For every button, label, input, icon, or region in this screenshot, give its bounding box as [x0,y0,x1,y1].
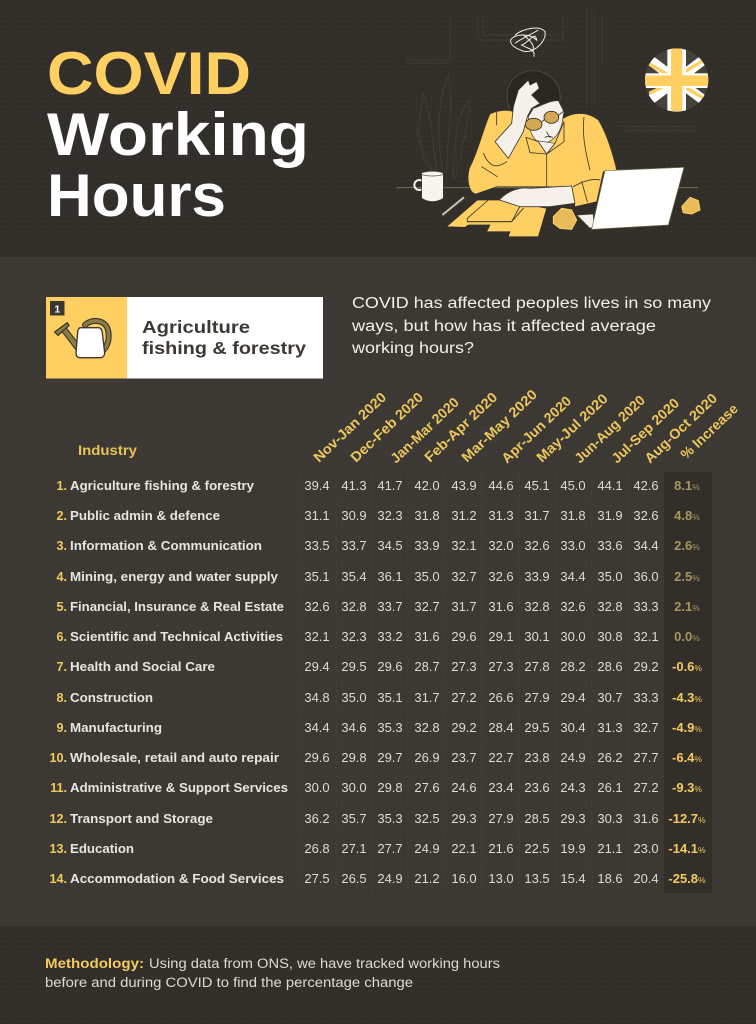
row 14: 26.5 [341,871,367,886]
row 7: 27.3 [451,659,477,674]
row 11 [50,780,702,795]
row 13 [49,841,706,856]
methodology [45,956,500,990]
row 7: 27.3 [488,659,514,674]
row 4: 32.7 [451,569,477,584]
row 6: 30.1 [524,629,550,644]
row 13: 21.6 [488,841,514,856]
row 4: 36.0 [633,569,659,584]
row 5: 33.3 [633,599,659,614]
illustration: stressed worker at desk [397,10,708,237]
row 10: 29.7 [377,750,403,765]
row 8: 35.1 [377,690,403,705]
row 14: 16.0 [451,871,477,886]
row 10: 10. [49,751,67,765]
row 4: 32.6 [488,569,514,584]
row 4: 36.1 [377,569,403,584]
row 11: 30.0 [304,780,330,795]
row 9: 35.3 [377,720,403,735]
card heading [142,317,306,358]
row 3: 32.1 [451,538,477,553]
row 11: 24.3 [560,780,586,795]
row 9: 32.7 [633,720,659,735]
crumpled paper [553,208,577,229]
row 11: -9.3% [672,780,702,795]
row 10: -6.4% [672,750,702,765]
row 3: 32.6 [524,538,550,553]
row 11: 26.1 [597,780,623,795]
row 9: 31.3 [597,720,623,735]
row 5: 32.6 [560,599,586,614]
column headings: months: Jul-Sep 2020 [608,395,682,466]
row 1: 45.1 [524,478,550,493]
row 13: 22.5 [524,841,550,856]
row 1: 1. [56,479,67,493]
row 13: 22.1 [451,841,477,856]
flag icon [645,48,708,112]
shirt [468,110,617,207]
row 4: 35.0 [597,569,623,584]
row 14: 21.2 [414,871,440,886]
row 1: 39.4 [304,478,330,493]
row 2: 31.8 [560,508,586,523]
row 6: 0.0% [674,629,700,644]
row 11: 11. [50,781,67,795]
row 4: 35.1 [304,569,330,584]
face [528,101,564,143]
row 14: 18.6 [597,871,623,886]
row 9: 9. [56,721,67,735]
row 7: 29.5 [341,659,367,674]
row 11: 27.2 [633,780,659,795]
title: Working [47,101,309,168]
row 12 [49,811,706,826]
row 9: 30.4 [560,720,586,735]
row 7: 27.8 [524,659,550,674]
row 1: 41.3 [341,478,367,493]
pen [442,197,464,215]
row 11: 27.6 [414,780,440,795]
row 8: 33.3 [633,690,659,705]
icon: watering can [55,321,109,358]
row 13: 19.9 [560,841,586,856]
row 4: 35.4 [341,569,367,584]
row 2: Public admin & defence [70,509,220,523]
intro text: ways, but how has it affected average [351,318,656,335]
row 13: 13. [49,842,67,856]
column headings: months: May-Jul 2020 [533,390,611,465]
row 3: 33.0 [560,538,586,553]
row 10: Wholesale, retail and auto repair [70,751,279,765]
row 3: 33.5 [304,538,330,553]
row 4: 33.9 [524,569,550,584]
hair [507,71,560,113]
row 2: 2. [56,509,67,523]
row 12: 35.7 [341,811,367,826]
row 14: 15.4 [560,871,586,886]
row 4: 4. [56,570,67,584]
row 5 [56,599,700,614]
badge number: 1 [54,304,60,316]
row 1: Agriculture fishing & forestry [70,479,254,493]
column headings: months: Jan-Mar 2020 [387,394,462,466]
row 3: 34.5 [377,538,403,553]
card heading: Agriculture [142,317,250,337]
row 5: 32.8 [341,599,367,614]
row 4: 34.4 [560,569,586,584]
row 12: 35.3 [377,811,403,826]
row 10: 23.7 [451,750,477,765]
row 9: 29.5 [524,720,550,735]
row 3: 3. [56,539,67,553]
papers and book [447,200,547,237]
row 4: 2.5% [674,569,700,584]
row 1: 8.1% [674,478,700,493]
row 11: Administrative & Support Services [70,781,288,795]
lower hand [499,186,575,207]
row 14: 13.5 [524,871,550,886]
row 13: 21.1 [597,841,623,856]
row 12: Transport and Storage [70,812,213,826]
row 7: 29.4 [304,659,330,674]
laptop [577,167,684,229]
row 7: 28.6 [597,659,623,674]
glasses [525,111,564,130]
row 1: 41.7 [377,478,403,493]
row 3: 32.0 [488,538,514,553]
row 1: 42.6 [633,478,659,493]
title: Hours [47,162,226,229]
column headings: months: Mar-May 2020 [458,386,540,465]
row 4: Mining, energy and water supply [70,570,278,584]
row 10: 29.6 [304,750,330,765]
column headings: months: % Increase [677,400,741,462]
row 1: 44.1 [597,478,623,493]
row 12: -12.7% [668,811,706,826]
row 10 [49,750,702,765]
row 3 [56,538,700,553]
row 9: 29.2 [451,720,477,735]
row 2: 30.9 [341,508,367,523]
row 11: 23.6 [524,780,550,795]
row 14: -25.8% [668,871,706,886]
row 9: -4.9% [672,720,702,735]
row 4 [56,569,700,584]
title [47,40,309,229]
row 2: 31.2 [451,508,477,523]
scribble thought [511,28,545,57]
row 12: 36.2 [304,811,330,826]
row 10: 26.2 [597,750,623,765]
row 12: 32.5 [414,811,440,826]
row 6 [56,629,700,644]
row 5: 32.6 [304,599,330,614]
collar [526,122,564,154]
column headings: months: Nov-Jan 2020 [310,389,389,465]
row 7 [56,659,702,674]
row 3: 33.7 [341,538,367,553]
row 13: 26.8 [304,841,330,856]
intro text [351,295,711,357]
category card [46,297,323,378]
badge number [50,301,64,316]
row 14: 20.4 [633,871,659,886]
row 8 [56,690,702,705]
row 3: 34.4 [633,538,659,553]
row 10: 29.8 [341,750,367,765]
row 2: 31.8 [414,508,440,523]
row 12: 31.6 [633,811,659,826]
row 7: 28.2 [560,659,586,674]
row 9: 32.8 [414,720,440,735]
row 14: Accommodation & Food Services [70,872,284,886]
row 7: 29.2 [633,659,659,674]
row 7: Health and Social Care [70,660,215,674]
row 8: 27.2 [451,690,477,705]
row 10: 23.8 [524,750,550,765]
row 2: 32.3 [377,508,403,523]
row 10: 26.9 [414,750,440,765]
row 2: 4.8% [674,508,700,523]
mug [414,171,443,202]
row 10: 27.7 [633,750,659,765]
column headings: months [310,386,741,466]
row 14: 24.9 [377,871,403,886]
row 11: 24.6 [451,780,477,795]
intro text: working hours? [351,340,474,357]
column headings: months: Aug-Oct 2020 [641,390,720,466]
row 2: 31.9 [597,508,623,523]
row 2: 31.7 [524,508,550,523]
row 9 [56,720,702,735]
row 12: 30.3 [597,811,623,826]
intro text: COVID has affected peoples lives in so many [352,295,711,312]
row 8: 30.7 [597,690,623,705]
row 11: 29.8 [377,780,403,795]
row 6: 33.2 [377,629,403,644]
row 14: 13.0 [488,871,514,886]
methodology: before and during COVID to find the percentage change [45,975,413,990]
row 9: Manufacturing [70,721,162,735]
row 10: 24.9 [560,750,586,765]
row 5: 31.7 [451,599,477,614]
row 6: 32.3 [341,629,367,644]
row 9: 34.4 [304,720,330,735]
row 8: -4.3% [672,690,702,705]
row 4: 35.0 [414,569,440,584]
row 14: 27.5 [304,871,330,886]
row 8: 29.4 [560,690,586,705]
row 9: 28.4 [488,720,514,735]
card heading: fishing & forestry [142,338,306,358]
row 7: 28.7 [414,659,440,674]
row 6: 29.1 [488,629,514,644]
row 6: 31.6 [414,629,440,644]
row 9: 34.6 [341,720,367,735]
methodology: Using data from ONS, we have tracked working hours [149,956,500,971]
row 3: 33.9 [414,538,440,553]
row 13: 27.7 [377,841,403,856]
row 2: 31.3 [488,508,514,523]
row 8: Construction [70,691,153,705]
row 13: 24.9 [414,841,440,856]
row 6: 30.8 [597,629,623,644]
row 1: 44.6 [488,478,514,493]
row 3: 2.6% [674,538,700,553]
column heading: industry: Industry [78,443,138,458]
row 5: 31.6 [488,599,514,614]
row 6: 30.0 [560,629,586,644]
row 1: 43.9 [451,478,477,493]
row 5: 2.1% [674,599,700,614]
row 10: 22.7 [488,750,514,765]
row 13: -14.1% [668,841,706,856]
methodology: Methodology: [45,956,144,971]
row 2 [56,508,700,523]
row 6: 29.6 [451,629,477,644]
row 8: 27.9 [524,690,550,705]
row 5: 32.8 [524,599,550,614]
column headings: months: Dec-Feb 2020 [347,389,426,465]
row 14: 14. [49,872,67,886]
row 13: Education [70,842,134,856]
row 1: 42.0 [414,478,440,493]
row 6: 32.1 [304,629,330,644]
row 6: 6. [56,630,67,644]
row 3: Information & Communication [70,539,262,553]
row 13: 27.1 [341,841,367,856]
row 12: 29.3 [451,811,477,826]
row 6: 32.1 [633,629,659,644]
row 2: 32.6 [633,508,659,523]
row 8: 8. [56,691,67,705]
row 8: 34.8 [304,690,330,705]
row 5: Financial, Insurance & Real Estate [70,600,284,614]
row 2: 31.1 [304,508,330,523]
row 5: 32.7 [414,599,440,614]
row 7: 7. [56,660,67,674]
row 1 [56,478,700,493]
row 8: 31.7 [414,690,440,705]
column headings: months: Feb-Apr 2020 [421,389,500,465]
row 12: 12. [49,812,67,826]
row 14 [49,871,706,886]
table highlight column [664,472,712,893]
row 13: 23.0 [633,841,659,856]
row 11: 23.4 [488,780,514,795]
row 1: 45.0 [560,478,586,493]
row 5: 32.8 [597,599,623,614]
row 6: Scientific and Technical Activities [70,630,283,644]
row 12: 28.5 [524,811,550,826]
raised arm and hand [495,80,540,158]
row 3: 33.6 [597,538,623,553]
row 8: 35.0 [341,690,367,705]
row 5: 5. [56,600,67,614]
row 12: 29.3 [560,811,586,826]
row 5: 33.7 [377,599,403,614]
row 11: 30.0 [341,780,367,795]
row 12: 27.9 [488,811,514,826]
column headings: months: Apr-Jun 2020 [498,392,575,466]
row 7: 29.6 [377,659,403,674]
title: COVID [47,40,251,107]
column headings: months: Jun-Aug 2020 [571,392,648,466]
row 7: -0.6% [672,659,702,674]
row 8: 26.6 [488,690,514,705]
